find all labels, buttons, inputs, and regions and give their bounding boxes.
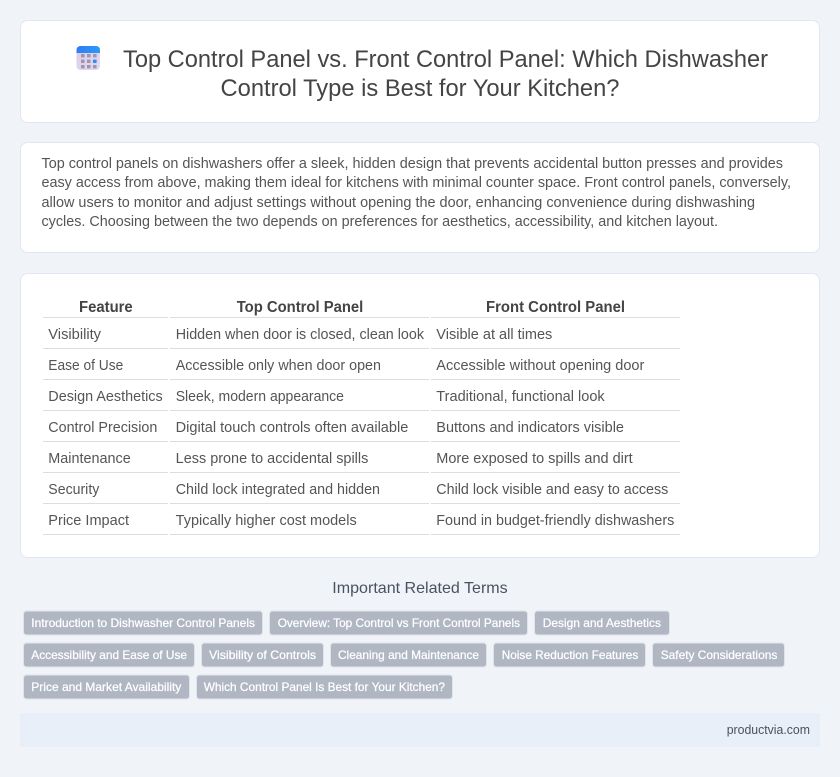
row: control precision: [48, 420, 624, 436]
title: Top Control Panel vs. Front Control Panel: Which Dishwasher: [123, 46, 768, 73]
related term tags: Noise Reduction Features: [502, 648, 638, 662]
panel: comparison table: [20, 274, 820, 558]
panel: summary paragraph: easy access from above, making them ideal for kitchens with minimal counter space. Front control panels, conversely,: [42, 175, 791, 191]
row: ease of use: Accessible without opening door: [436, 358, 644, 374]
related term tags: Design and Aesthetics: [543, 616, 661, 630]
icon: calendar grid: [76, 46, 100, 70]
related term tags: Safety Considerations: [661, 648, 777, 662]
row: ease of use: Ease of Use: [48, 358, 123, 374]
related term tags: Introduction to Dishwasher Control Panels: [31, 616, 255, 630]
table header row: Top Control Panel: [237, 299, 363, 316]
related term tags: Overview: Top Control vs Front Control Panels: [278, 616, 520, 630]
row: design aesthetics: [48, 389, 606, 405]
footer bar: [20, 713, 820, 747]
row: ease of use: Accessible only when door open: [176, 358, 381, 374]
title: [123, 46, 768, 102]
row: visibility: Visible at all times: [436, 327, 552, 343]
row: visibility: Visibility: [48, 327, 102, 343]
related term tags: Visibility of Controls: [209, 648, 316, 662]
row: design aesthetics: Design Aesthetics: [48, 389, 163, 405]
related term tags: [24, 611, 784, 699]
row: ease of use: [48, 358, 644, 374]
related term tags: Which Control Panel Is Best for Your Kitchen?: [204, 680, 445, 694]
panel: summary paragraph: [20, 142, 820, 252]
panel: summary paragraph: allow users to monitor and adjust settings without opening the door, enhancing convenience during dishwashing: [42, 195, 755, 211]
row: security: Child lock integrated and hidden: [176, 482, 380, 498]
related term tags: Price and Market Availability: [31, 680, 181, 694]
panel: summary paragraph: cycles. Choosing between the two depends on preferences for aesthetics, accessibility, and kitchen layout.: [42, 214, 718, 230]
row: control precision: Control Precision: [48, 420, 157, 436]
footer bar: productvia.com: [727, 723, 810, 737]
table header row: Front Control Panel: [486, 299, 625, 316]
row: visibility: [48, 327, 552, 343]
row: maintenance: Less prone to accidental spills: [176, 451, 368, 467]
row: price impact: Typically higher cost models: [176, 513, 357, 529]
row: visibility: Hidden when door is closed, clean look: [176, 327, 425, 343]
row: security: Child lock visible and easy to access: [436, 482, 668, 498]
related term tags: Accessibility and Ease of Use: [31, 648, 187, 662]
row: maintenance: More exposed to spills and dirt: [436, 451, 633, 467]
title: Control Type is Best for Your Kitchen?: [220, 75, 620, 102]
row: design aesthetics: Traditional, functional look: [436, 389, 606, 405]
row: control precision: Buttons and indicators visible: [436, 420, 624, 436]
row: security: Security: [48, 482, 100, 498]
panel: summary paragraph: Top control panels on dishwashers offer a sleek, hidden design that prevents accidental button presses and provides: [42, 156, 783, 172]
row: maintenance: Maintenance: [48, 451, 131, 467]
table header row: Feature: [79, 299, 133, 316]
row: maintenance: [48, 451, 633, 467]
heading: important related terms: Important Related Terms: [332, 580, 508, 597]
row: design aesthetics: Sleek, modern appearance: [176, 389, 344, 405]
table header row: [79, 299, 625, 316]
row: price impact: [48, 513, 674, 529]
related term tags: Cleaning and Maintenance: [338, 648, 479, 662]
row: security: [48, 482, 668, 498]
row: control precision: Digital touch controls often available: [176, 420, 408, 436]
header panel: [20, 20, 820, 122]
row: price impact: Price Impact: [48, 513, 129, 529]
row: price impact: Found in budget-friendly dishwashers: [436, 513, 674, 529]
